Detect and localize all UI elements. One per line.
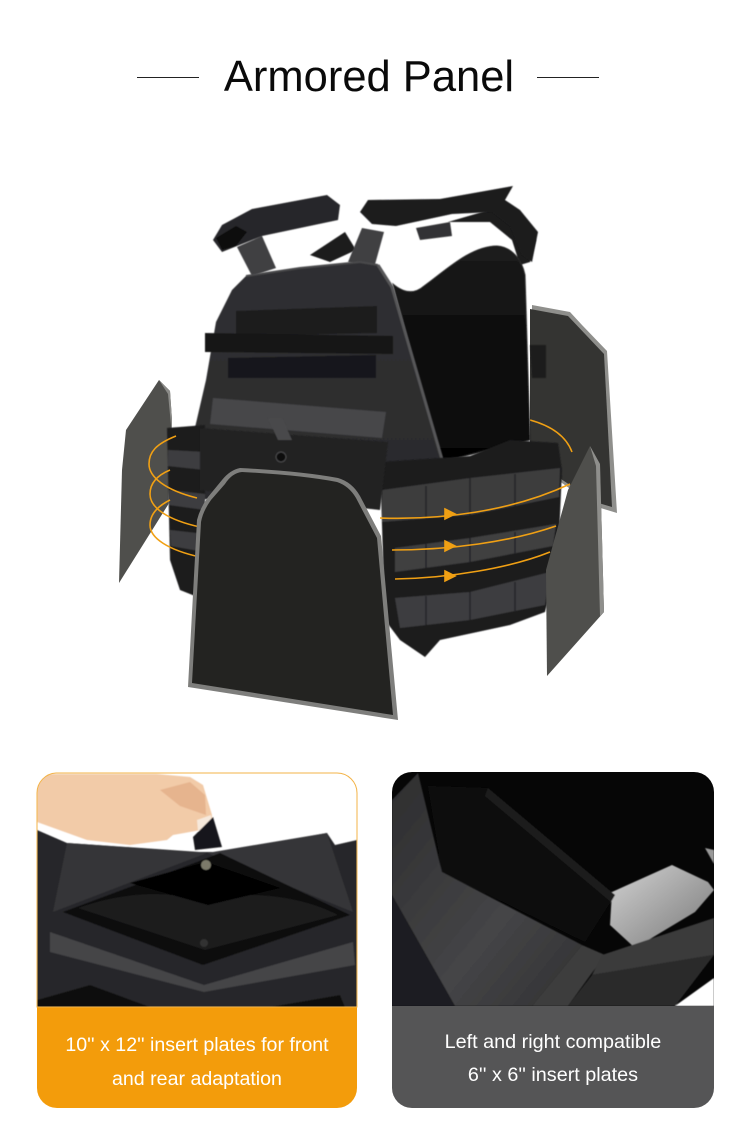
armor plate: left <box>119 380 172 583</box>
illustration: plate carrier with armor panels <box>119 186 617 720</box>
vest: shoulder straps <box>213 186 538 276</box>
caption: grey <box>392 1006 714 1108</box>
vest: insert pocket flap <box>200 418 388 510</box>
front webbing band <box>210 398 386 438</box>
vest: back strap and rear mesh <box>310 208 546 462</box>
armor plate: rear <box>530 305 617 513</box>
armor plate: right <box>546 446 604 676</box>
caption: orange: 10'' x 12'' insert plates for front <box>65 1034 329 1056</box>
vest pouch <box>37 830 357 1007</box>
title: Armored Panel <box>224 53 514 101</box>
panel outline <box>37 773 357 1007</box>
vest: cummerbund right side <box>380 440 562 657</box>
vest: cummerbund left side <box>167 425 205 600</box>
panel: front and rear insert plates <box>36 772 358 1108</box>
photo: hand lifting pocket flap <box>36 772 358 1008</box>
photo: side pocket close-up <box>392 772 714 1008</box>
velcro strips <box>205 306 393 378</box>
caption: grey: Left and right compatible <box>445 1031 661 1053</box>
vest: front panel <box>194 262 444 500</box>
panel: side insert plates <box>392 772 714 1108</box>
armor plate: front <box>188 468 398 720</box>
caption: orange: and rear adaptation <box>112 1068 282 1090</box>
orange rings <box>149 436 570 581</box>
orange ring: rear arc <box>530 420 572 452</box>
hand <box>37 774 212 845</box>
caption: grey: 6'' x 6'' insert plates <box>468 1064 638 1086</box>
caption: orange <box>37 1007 357 1108</box>
